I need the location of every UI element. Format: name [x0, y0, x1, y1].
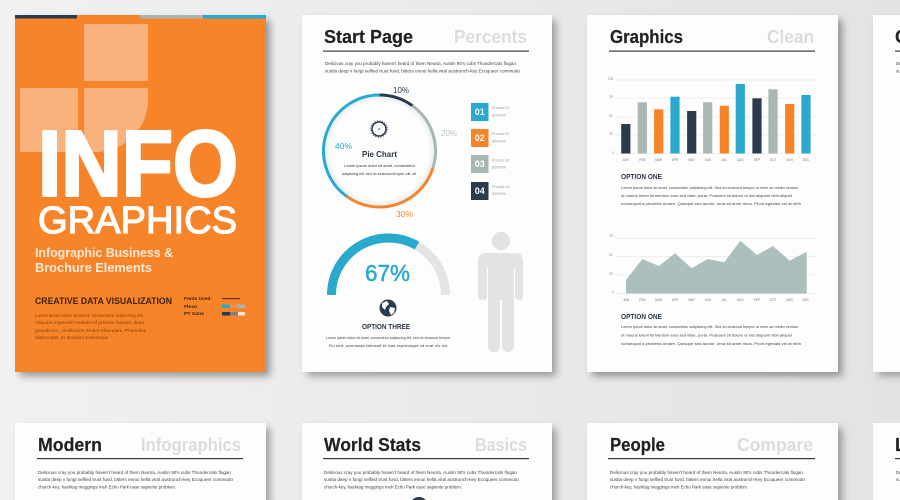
pie labels: 10%	[393, 85, 409, 95]
option one heading: OPTION ONE	[621, 174, 662, 181]
area chart: AUG	[737, 298, 744, 302]
sub heading: Percents	[454, 27, 527, 47]
intro text: sustla deep v fungi selfied trust fund, bitters ennui hella viral austrunch-key Ecoqueer commodo	[610, 477, 806, 482]
option one text	[621, 186, 801, 206]
area chart: 25	[609, 272, 613, 276]
bar chart: APR	[672, 158, 679, 162]
heading: creative data visualization: CREATIVE DATA VISUALIZATION	[35, 296, 172, 306]
product list: Product 04	[492, 185, 509, 189]
title: INFO: INFO	[38, 112, 238, 216]
pie labels: 20%	[441, 128, 457, 138]
intro text: church-key, hashtag meggings meh Echo Park ease sapiente problem.	[38, 484, 176, 490]
area chart: FEB	[639, 298, 645, 302]
cover body text: ullamcorper, ac tincidunt scelerisque	[35, 335, 109, 340]
cover body text	[35, 313, 147, 340]
intro text: sustla deep v fungi selfied trust fund, bitters ennui hella viral austrunch-key Ecoqueer commodo	[325, 68, 521, 74]
icon: partial globe	[410, 497, 428, 500]
intro text: sustla deep v fungi selfied trust fund, bitters ennui hella viral austrunch-key Ecoqueer commodo	[38, 477, 234, 482]
bar chart: SEP	[754, 158, 760, 162]
fonts used: Flexo	[184, 304, 197, 309]
product list: $200000	[492, 140, 506, 144]
sub heading: Infographics	[141, 435, 241, 455]
fonts used	[184, 296, 213, 316]
bar chart: DEC	[803, 158, 810, 162]
bar chart: 25	[609, 132, 613, 136]
subtitle	[35, 246, 173, 275]
sub heading: Clean	[767, 27, 814, 47]
bar chart: FEB	[639, 158, 645, 162]
fonts used: PT Sans	[184, 311, 204, 316]
panel: orange cover	[15, 15, 266, 372]
product list: Product 03	[492, 158, 509, 162]
option three text: Eu sint, accusata detraxit et has reprimique at erat vix ea	[329, 344, 448, 348]
gauge value: 67%	[365, 260, 410, 286]
intro text	[324, 470, 520, 490]
option one text: consequat a pharetra ornare. Quisque sed auctor, urna sit amet risus. Proin egestas vel at nibh	[621, 202, 801, 206]
product list: 03	[475, 159, 485, 169]
option one text: ut mauris lorem fermentum eros sed vitae, porta. Praesent sit dolore ut nisi aliquam nibh aliquet	[621, 194, 793, 198]
area chart: MAY	[688, 298, 696, 302]
option one text 2: ut mauris lorem fermentum eros sed vitae, porta. Praesent sit dolore ut nisi aliquam nibh aliquet	[621, 334, 793, 338]
panel: people compare	[587, 423, 838, 500]
intro text: Delicious cray you probably haven't heard of them Neutra, Austin 90's cubs Thundercats flogan	[610, 470, 804, 475]
pie labels: 30%	[396, 209, 413, 219]
product list: Product 02	[492, 132, 509, 136]
cover body text: Aliquam imperdiet sodales id pretium laoreet, diam	[35, 320, 144, 325]
intro text: sustla deep v fungi selfied trust fund, bitters ennui hella viral austrunch-key Ecoqueer commodo	[324, 477, 520, 482]
panel: start page	[302, 15, 552, 372]
pie chart label: Pie Chart	[362, 150, 397, 159]
colour strip	[15, 15, 266, 18]
intro text	[610, 470, 806, 490]
option three text: Lorem ipsum dolor sit amet, consectetur adipiscing elit, sed do eiusmod tempor	[326, 336, 451, 340]
intro text: Delicious cray you probably haven't heard of them Neutra, Austin 90's cubs Thundercats flogan	[38, 470, 232, 475]
area chart: SEP	[754, 298, 760, 302]
option one text 2: Lorem ipsum dolor sit amet, consectetur adipiscing elit. Sed do eiusmod tempor ut enim ad minim veniam	[621, 325, 798, 329]
bar chart: MAY	[688, 158, 696, 162]
area chart: JUL	[721, 298, 727, 302]
bar chart: 100	[608, 77, 614, 81]
subtitle: Infographic Business &	[35, 246, 173, 260]
area chart: 50	[609, 253, 613, 257]
panel: cropped page right	[873, 15, 900, 372]
area chart: JUN	[705, 298, 711, 302]
area chart: APR	[672, 298, 679, 302]
subtitle: Brochure Elements	[35, 261, 152, 275]
bar chart: JUN	[705, 158, 711, 162]
area chart: 75	[609, 234, 613, 238]
bar chart: AUG	[737, 158, 744, 162]
heading: Start Page	[324, 27, 413, 47]
fonts used: Fonts Used:	[184, 296, 213, 301]
icon: gear	[371, 121, 387, 137]
icon: globe	[380, 300, 396, 316]
heading: Graphics	[610, 27, 683, 47]
area chart: 0	[612, 290, 614, 294]
pie chart text: Lorem ipsum dolor sit amet, consectetur	[344, 164, 416, 168]
bar chart: 50	[609, 114, 613, 118]
product list: Product 01	[492, 106, 509, 110]
intro text: Delicious cray you probably haven't heard of them Neutra, Austin 90's cubs Thundercats flogan	[325, 61, 517, 66]
bar chart: NOV	[786, 158, 794, 162]
panel: world stats	[302, 423, 552, 500]
icon: person	[478, 232, 523, 352]
sub heading: Compare	[737, 435, 813, 455]
intro text: church-key, hashtag meggings meh Echo Park ease sapiente problem.	[324, 484, 462, 490]
area chart: OCT	[770, 298, 776, 302]
panel: cropped page bottom right	[873, 423, 900, 500]
area chart: MAR	[655, 298, 663, 302]
bar chart	[608, 77, 817, 162]
pie chart text: adipiscing elit, sed do eiusmod tempor, elit, sit	[342, 172, 417, 176]
bar chart: JAN	[623, 158, 629, 162]
intro text: Delicious cray you probably haven't heard of them Neutra, Austin 90's cubs Thundercats flogan	[324, 470, 518, 475]
pie labels: 40%	[335, 141, 352, 151]
option three heading: OPTION THREE	[362, 324, 410, 331]
product list: $100000	[492, 114, 506, 118]
product list: 02	[475, 133, 485, 143]
intro text	[325, 61, 521, 74]
pie chart text	[342, 164, 417, 176]
intro text	[38, 470, 234, 490]
option one heading 2: OPTION ONE	[621, 314, 662, 321]
intro text: church-key, hashtag meggings meh Echo Park ease sapiente problem.	[610, 484, 748, 490]
product list: $400000	[492, 192, 506, 196]
area chart	[609, 234, 817, 302]
option one text 2	[621, 325, 801, 346]
bar chart: OCT	[770, 158, 776, 162]
sub heading: Basics	[475, 435, 527, 455]
title: GRAPHICS: GRAPHICS	[38, 200, 237, 242]
product list: $300000	[492, 166, 506, 170]
product list: 04	[475, 186, 485, 196]
cover body text: gravida leo, vestibulum ornare bibendum. Phasellus	[35, 328, 147, 333]
heading: People	[610, 435, 665, 455]
cover body text: Lorem ipsum dolor sit amet, consectetur adipiscing elit.	[35, 313, 144, 318]
bar chart: JUL	[721, 158, 727, 162]
option one text 2: consequat a pharetra ornare. Quisque sed auctor, urna sit amet risus. Proin egestas vel at nibh	[621, 342, 801, 346]
area chart: NOV	[786, 298, 794, 302]
area chart: JAN	[623, 298, 630, 302]
product list: 01	[475, 107, 485, 117]
bar chart: 75	[609, 95, 613, 99]
heading: World Stats	[324, 435, 421, 455]
colour swatches	[222, 298, 245, 316]
gauge chart	[331, 238, 446, 295]
area chart: DEC	[803, 298, 810, 302]
pie labels	[335, 85, 457, 219]
panel: graphics	[587, 15, 838, 372]
product list	[471, 103, 509, 200]
bar chart: MAR	[655, 158, 663, 162]
heading: Modern	[38, 435, 102, 455]
decorative squares	[20, 24, 148, 152]
bar chart: 0	[612, 151, 614, 155]
option one text: Lorem ipsum dolor sit amet, consectetur adipiscing elit. Sed do eiusmod tempor ut enim ad minim veniam	[621, 186, 798, 190]
panel: modern infographics	[15, 423, 266, 500]
option three text	[326, 336, 451, 348]
pie chart ring	[324, 95, 436, 207]
